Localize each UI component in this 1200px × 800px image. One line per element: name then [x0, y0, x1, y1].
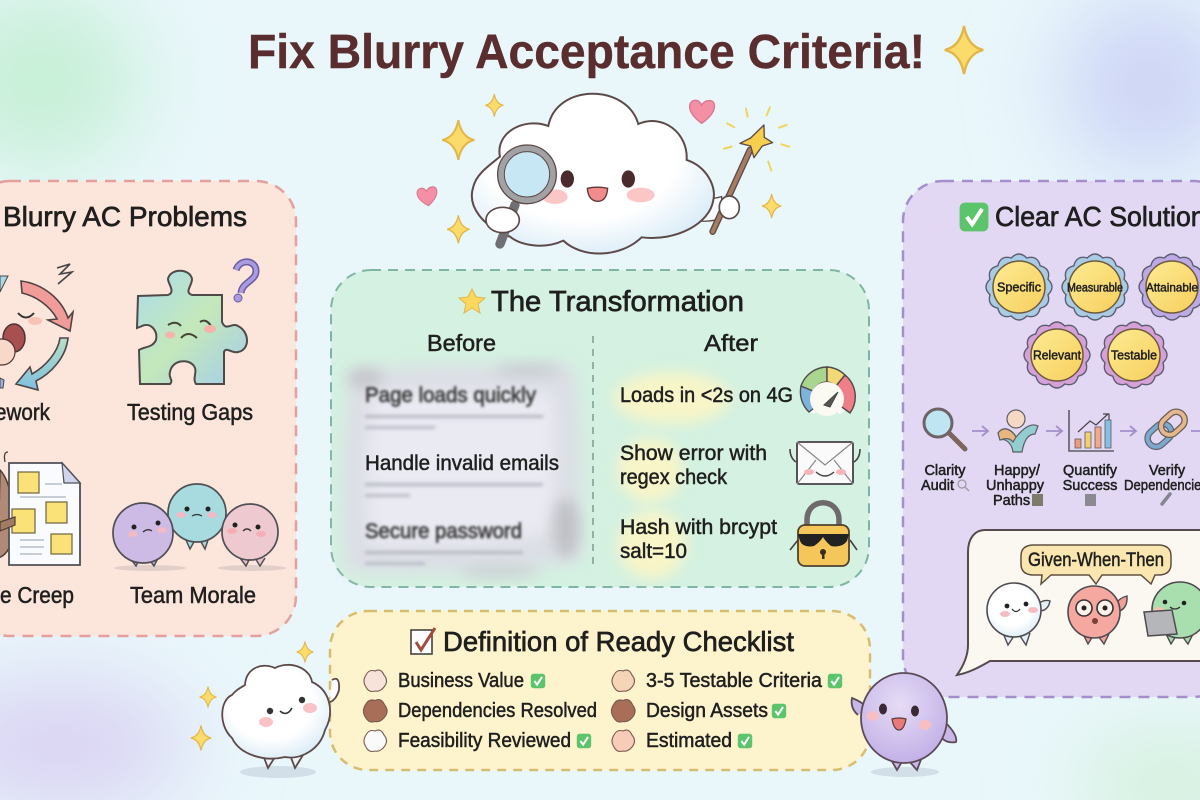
panel: blurry AC problems: [0, 181, 296, 636]
icon: checkbox: [411, 628, 435, 654]
step label: clarity audit: [921, 463, 969, 494]
icon: title sparkle: [945, 26, 983, 74]
badge: relevant: Relevant: [1033, 348, 1081, 362]
character: green blob with tablet: [1144, 582, 1200, 644]
column: before: [343, 330, 582, 577]
badge: attainable: Attainable: [1146, 280, 1198, 294]
icon: scope creep document: [0, 452, 80, 565]
title: Fix Blurry Acceptance Criteria!: [248, 26, 925, 79]
step label: quantify success: Success: [1063, 478, 1117, 494]
icon: branching paths: [998, 410, 1038, 452]
icon: bar chart: [1069, 410, 1114, 451]
step label: verify dependencies: Verify: [1149, 463, 1186, 479]
item: testable criteria: 3-5 Testable Criteria: [646, 670, 823, 692]
column: after: [614, 330, 860, 579]
badge: specific: [986, 254, 1052, 320]
icon: team morale blobs: [113, 484, 286, 571]
item: dependencies resolved: Dependencies Resolved: [398, 700, 597, 722]
character: white blob: [987, 583, 1050, 645]
heading: definition of ready: Definition of Ready Checklist: [443, 626, 794, 657]
item: estimated: Estimated: [646, 730, 732, 752]
badge: measurable: [1062, 254, 1128, 320]
text: hash with brcrypt: salt=10: [620, 540, 687, 563]
badge: attainable: [1139, 254, 1200, 320]
column: before: Before: [427, 330, 496, 356]
mascot: cloud with magnifier and wand: [416, 94, 789, 254]
sparkles and hearts around cloud: [416, 94, 781, 243]
badge: measurable: Measurable: [1067, 282, 1123, 294]
text: show error: [620, 442, 767, 489]
text: loads in 2s: Loads in <2s on 4G: [620, 384, 793, 407]
badge: testable: Testable: [1111, 348, 1157, 362]
step label: happy unhappy paths: Paths: [993, 493, 1030, 509]
panel: clear AC solutions: [903, 181, 1200, 697]
icon: speed gauge: [800, 367, 855, 416]
mascot: bottom left cloud: [191, 642, 339, 778]
icon: puzzle piece: [137, 262, 256, 384]
icon: magnifier step: [924, 409, 965, 449]
text: hash with brcrypt: Hash with brcypt: [620, 516, 777, 539]
mascot: bottom right purple blob: [852, 673, 956, 777]
item: design assets: Design Assets: [646, 700, 768, 722]
cloud face: [542, 170, 655, 204]
column: after: After: [704, 330, 758, 356]
item: feasibility reviewed: Feasibility Reviewed: [398, 730, 571, 752]
cloud arm: [695, 197, 722, 221]
speech bubble: [957, 530, 1200, 675]
wand: [713, 107, 789, 232]
arrow: [1120, 426, 1136, 436]
icon: padlock with sunglasses: [790, 503, 857, 566]
label: testing gaps: Testing Gaps: [127, 399, 253, 425]
highlight glows: [614, 372, 730, 579]
icon: chain link: [1144, 408, 1188, 450]
badge: relevant: [1024, 322, 1090, 388]
label: given when then: [1021, 545, 1171, 584]
badge: testable: [1101, 322, 1167, 388]
panel: the transformation: [331, 270, 869, 587]
text: page loads quickly: Page loads quickly: [365, 384, 536, 407]
arrow: [1046, 426, 1062, 436]
step label: clarity audit: Clarity: [924, 463, 966, 479]
panel: definition of ready checklist: [330, 611, 870, 770]
character: red blob with glasses: [1068, 586, 1127, 644]
magnifier: [486, 145, 556, 244]
icon: green check: [960, 203, 988, 231]
text: secure password: Secure password: [365, 520, 522, 543]
label: given when then: Given-When-Then: [1028, 550, 1164, 571]
text: hash with brcrypt: [620, 516, 777, 563]
text: show error: Show error with: [620, 442, 767, 465]
step label: happy unhappy paths: [986, 463, 1045, 509]
arrow: [1191, 430, 1200, 432]
text: handle invalid emails: Handle invalid emails: [365, 452, 559, 475]
arrow: [972, 426, 988, 436]
question mark: [236, 262, 256, 293]
step label: happy unhappy paths: Unhappy: [986, 478, 1045, 494]
step label: quantify success: [1063, 463, 1118, 506]
icon: smiling envelope: [790, 442, 860, 484]
label: scope creep: e Creep: [0, 582, 74, 608]
item: estimated: [612, 730, 752, 752]
item: business value: Business Value: [398, 670, 524, 692]
heading: blurry AC problems: Blurry AC Problems: [3, 201, 247, 232]
step label: verify dependencies: [1124, 463, 1200, 504]
text: show error: regex check: [620, 466, 727, 489]
step label: quantify success: Quantify: [1063, 463, 1118, 479]
step label: happy unhappy paths: Happy/: [994, 463, 1041, 479]
badge: specific: Specific: [997, 280, 1041, 294]
step label: clarity audit: Audit: [921, 478, 954, 494]
label: team morale: Team Morale: [130, 582, 256, 608]
heading: the transformation: The Transformation: [491, 286, 744, 318]
icon: rework cycle: [0, 264, 73, 390]
cloud body: [472, 94, 714, 254]
icon: star: [459, 289, 485, 313]
blurred panel: [343, 364, 582, 577]
